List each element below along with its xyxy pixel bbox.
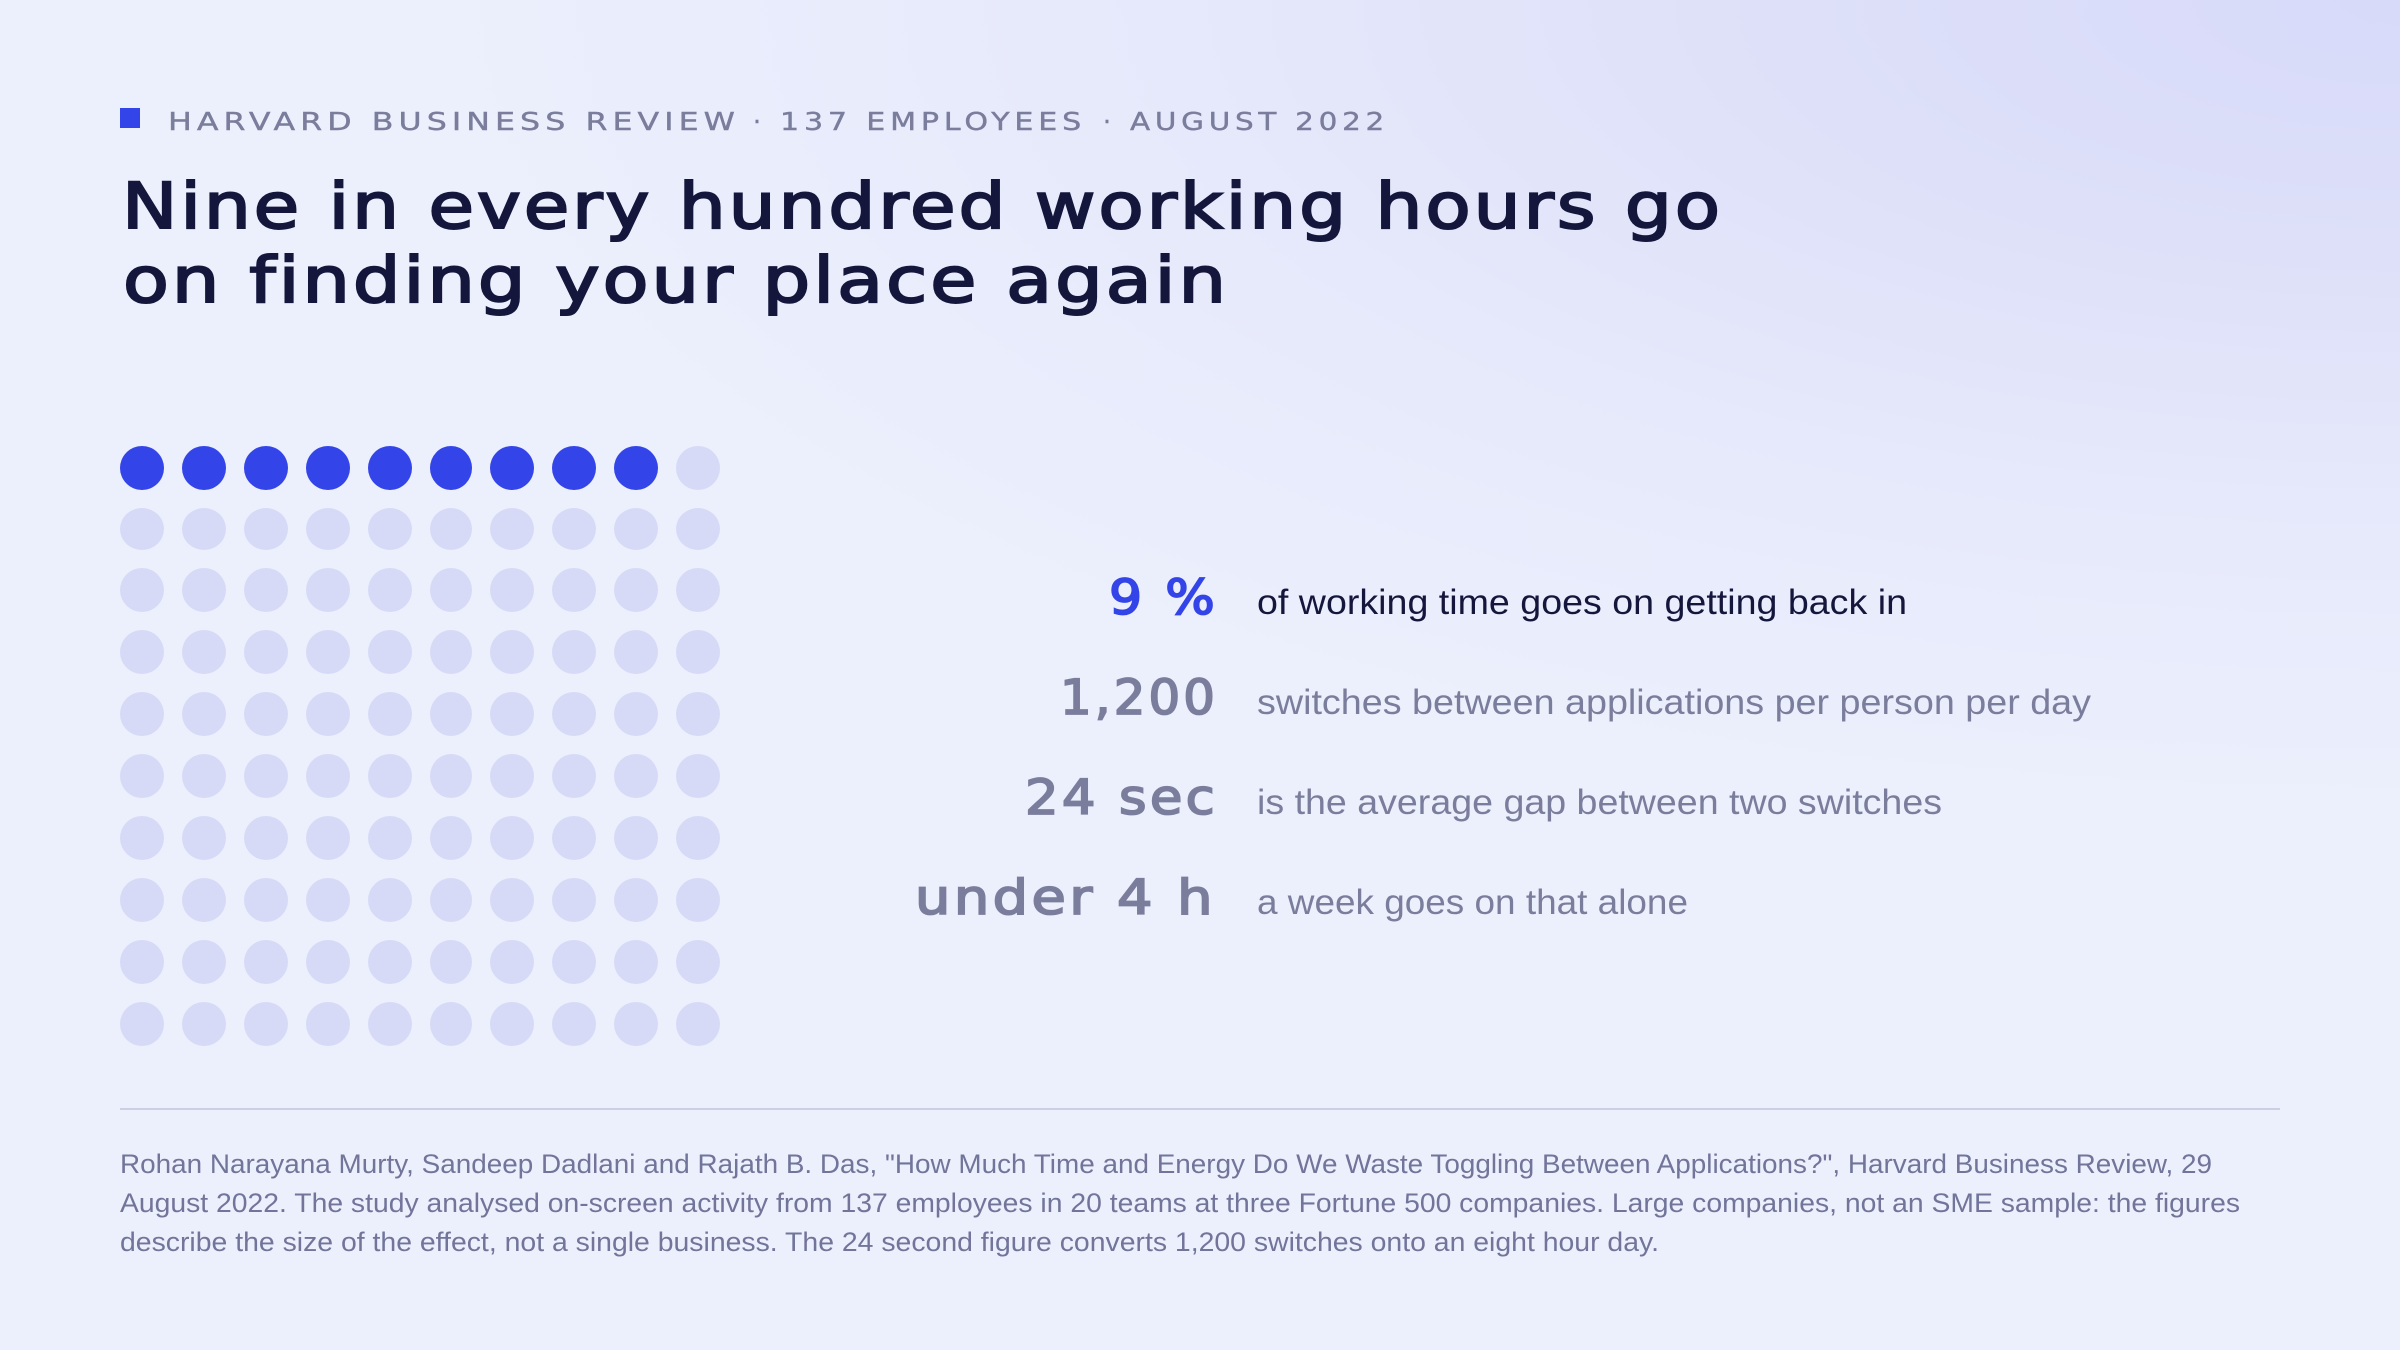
source footnote: Rohan Narayana Murty, Sandeep Dadlani and Rajath B. Das, "How Much Time and Energy Do We Waste Toggling Between Applications?", Harvard Business Review, 29 <box>120 1149 2212 1179</box>
source footnote: describe the size of the effect, not a single business. The 24 second figure converts 1,200 switches onto an eight hour day. <box>120 1227 1659 1257</box>
stat: under 4 hours: a week goes on that alone <box>1257 883 1688 922</box>
icon: blue square marker <box>120 108 140 128</box>
eyebrow source line: AUGUST 2022 <box>1130 107 1389 136</box>
stat: 24 seconds: 24 sec <box>1025 770 1218 826</box>
eyebrow source line: · <box>1103 107 1111 136</box>
stat: under 4 hours: under 4 h <box>915 870 1216 926</box>
title <box>122 170 1723 317</box>
eyebrow source line: 137 EMPLOYEES <box>780 107 1086 136</box>
title: on finding your place again <box>123 244 1229 317</box>
stat: 24 seconds <box>1025 770 1942 826</box>
stat: 9 percent <box>1109 570 1907 626</box>
highlighted dots <box>120 446 658 490</box>
stat: 9 percent: of working time goes on getting back in <box>1257 583 1907 622</box>
source footnote: August 2022. The study analysed on-screen activity from 137 employees in 20 teams at three Fortune 500 companies. Large companies, not an SME sample: the figures <box>120 1188 2240 1218</box>
eyebrow source line: HARVARD BUSINESS REVIEW <box>168 107 740 136</box>
stat: 1,200 switches: switches between applications per person per day <box>1257 683 2092 722</box>
eyebrow source line: · <box>753 107 761 136</box>
stat: 24 seconds: is the average gap between two switches <box>1257 783 1942 822</box>
stat: 1,200 switches: 1,200 <box>1060 670 1218 726</box>
dot grid: nine of one hundred highlighted <box>120 446 720 1046</box>
source footnote <box>120 1149 2240 1257</box>
remaining dots <box>120 446 720 1046</box>
stats list <box>915 570 2092 926</box>
header <box>120 107 1723 317</box>
stat: 1,200 switches <box>1060 670 2092 726</box>
eyebrow source line <box>168 107 1389 136</box>
stat: under 4 hours <box>915 870 1688 926</box>
title: Nine in every hundred working hours go <box>122 170 1723 243</box>
stat: 9 percent: 9 % <box>1109 570 1218 626</box>
